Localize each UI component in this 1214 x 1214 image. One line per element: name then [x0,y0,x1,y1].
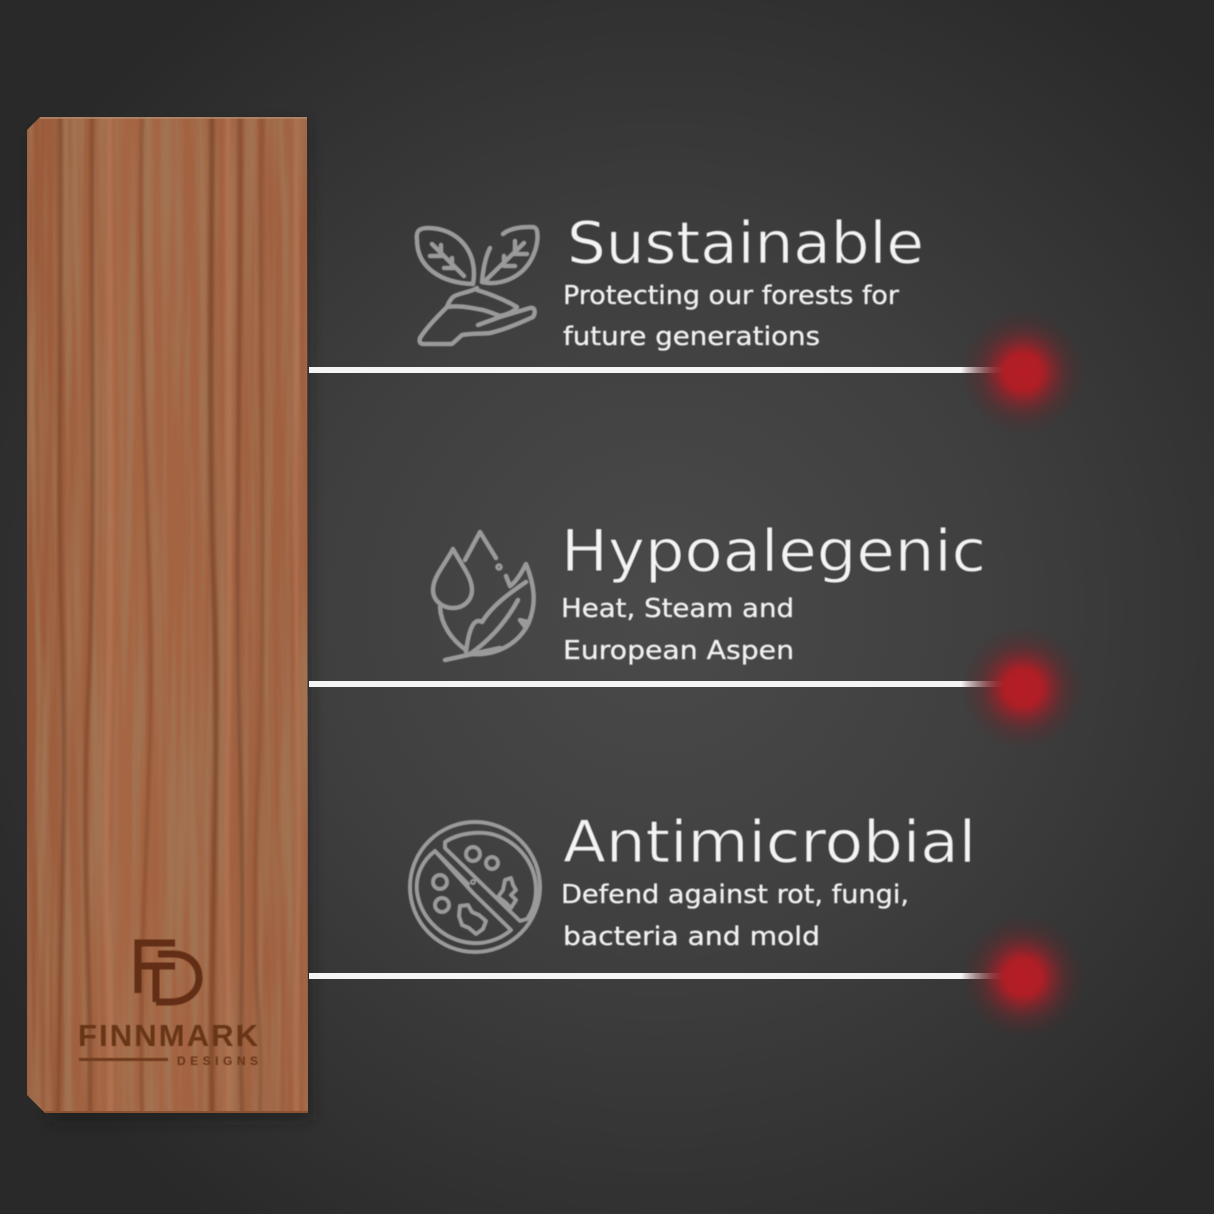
red glow dot: antimicrobial [961,915,1085,1039]
logo tagline: DESIGNS [177,1054,258,1068]
engraved logo [78,943,259,1068]
description: sustainable: future generations [563,322,820,352]
connector line: hypoalegenic [309,681,1003,687]
description: sustainable [563,281,899,352]
red glow dot: sustainable [961,310,1085,434]
heading: hypoalegenic: Hypoalegenic [561,517,986,585]
logo mark: FD monogram [138,943,199,1002]
wood plank [27,117,312,1122]
description: antimicrobial [561,880,909,952]
feature: antimicrobial [309,808,1085,1039]
icon: leaves growing from hand [417,227,537,344]
logo tagline [79,1054,258,1068]
icon: no microbes symbol [410,822,540,952]
icon: water drop, flame and feather [433,532,534,660]
description: antimicrobial: bacteria and mold [563,922,820,952]
connector line: antimicrobial [309,973,1003,979]
description: sustainable: Protecting our forests for [563,281,899,311]
connector line: sustainable [309,367,1003,373]
description: hypoalegenic: European Aspen [563,636,794,666]
heading: antimicrobial: Antimicrobial [563,808,976,876]
heading: sustainable: Sustainable [567,209,924,277]
description: antimicrobial: Defend against rot, fungi, [561,880,909,910]
feature: sustainable [309,209,1085,434]
logo wordmark: FINNMARK [78,1018,259,1053]
description: hypoalegenic [561,594,794,666]
description: hypoalegenic: Heat, Steam and [561,594,794,624]
feature: hypoalegenic [309,517,1085,750]
red glow dot: hypoalegenic [961,626,1085,750]
